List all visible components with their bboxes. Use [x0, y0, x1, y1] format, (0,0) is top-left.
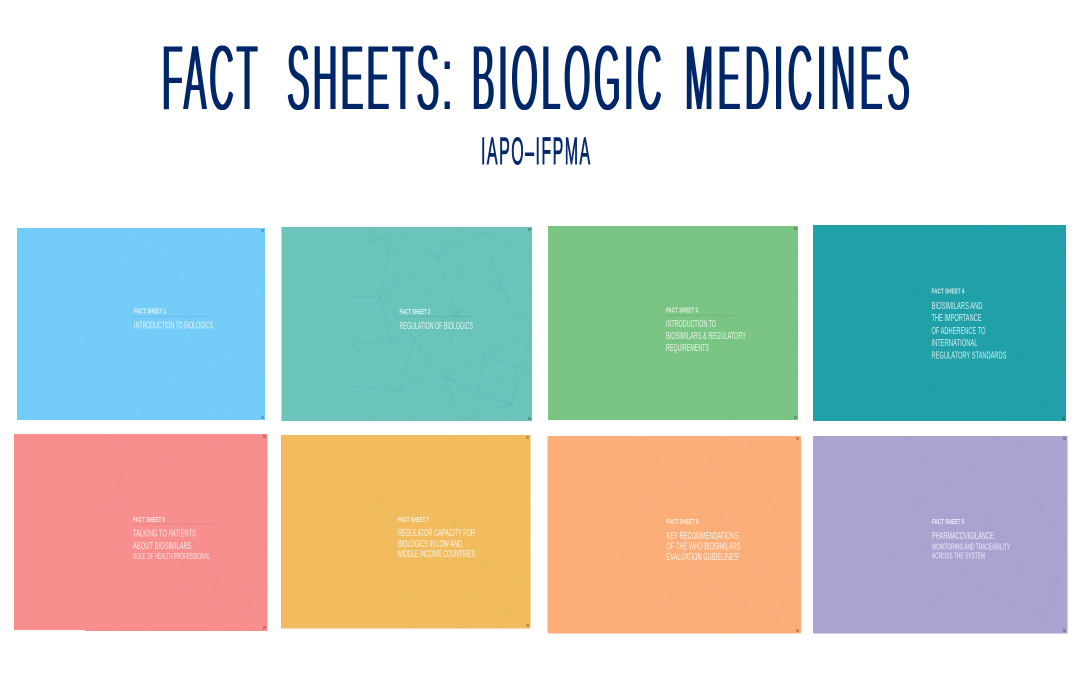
panel: fact sheet 7: MIDDLE INCOME COUNTRIES	[398, 548, 475, 560]
panel: fact sheet 6: FACT SHEET 6	[133, 515, 165, 524]
title	[162, 25, 910, 130]
panel: fact sheet 6: TALKING TO PATIENTS	[133, 528, 196, 540]
panel: fact sheet 1	[17, 228, 265, 420]
panel: fact sheet 5: MONITORING AND TRACEABILITY	[932, 542, 1010, 552]
panel: fact sheet 4: THE IMPORTANCE	[932, 312, 982, 324]
panel: fact sheet 4: OF ADHERENCE TO	[932, 325, 986, 337]
panel: fact sheet 8: KEY RECOMMENDATIONS	[666, 530, 738, 542]
panel: fact sheet 3: REQUIREMENTS	[666, 342, 709, 354]
panel: fact sheet 8: OF THE WHO BIOSIMILARS	[666, 540, 740, 552]
panel: fact sheet 2	[282, 227, 532, 421]
title: SHEETS:	[287, 25, 452, 130]
panel: fact sheet 6: ROLE OF HEALTH PROFESSIONAL	[133, 552, 210, 561]
panel: fact sheet 3: BIOSIMILARS & REGULATORY	[666, 330, 746, 342]
panel: fact sheet 4: BIOSIMILARS AND	[932, 300, 983, 312]
title: MEDICINES	[685, 25, 910, 130]
panel: fact sheet 5: FACT SHEET 5	[932, 517, 964, 526]
panel: fact sheet 7: FACT SHEET 7	[398, 515, 429, 524]
panel: fact sheet 5: PHARMACOVIGILANCE:	[932, 530, 995, 542]
panel: fact sheet 7: BIOLOGICS IN LOW-AND	[398, 538, 462, 550]
panel: fact sheet 2: FACT SHEET 2	[400, 307, 430, 316]
panel: fact sheet 1: INTRODUCTION TO BIOLOGICS	[134, 320, 213, 332]
panel: fact sheet 5: ACROSS THE SYSTEM	[932, 552, 985, 560]
title: BIOLOGIC	[472, 25, 662, 130]
panel: fact sheet 8	[548, 436, 801, 634]
panel: fact sheet 3	[548, 226, 798, 420]
panel: fact sheet 3: INTRODUCTION TO	[666, 318, 716, 330]
panel: fact sheet 6	[14, 434, 268, 631]
panel: fact sheet 8: FACT SHEET 8	[666, 517, 698, 526]
panel: fact sheet 8: EVALUATION GUIDELINES¹	[666, 551, 740, 563]
panel: fact sheet 5	[813, 436, 1068, 634]
panel: fact sheet 7: REGULATOR CAPACITY FOR	[398, 527, 475, 539]
panel: fact sheet 3: FACT SHEET 3	[666, 306, 698, 314]
panel: fact sheet 4	[813, 225, 1066, 421]
panel: fact sheet 2: REGULATION OF BIOLOGICS	[400, 320, 473, 332]
subtitle: IAPO–IFPMA	[481, 131, 591, 173]
panel: fact sheet 1: FACT SHEET 1	[134, 306, 166, 316]
panel: fact sheet 4: REGULATORY STANDARDS	[932, 350, 1006, 362]
panel: fact sheet 4: FACT SHEET 4	[932, 286, 965, 296]
panel: fact sheet 6: ABOUT BIOSIMILARS	[133, 540, 192, 552]
panel: fact sheet 7	[281, 435, 530, 628]
panel: fact sheet 4: INTERNATIONAL	[932, 337, 978, 349]
title: FACT	[162, 25, 257, 130]
